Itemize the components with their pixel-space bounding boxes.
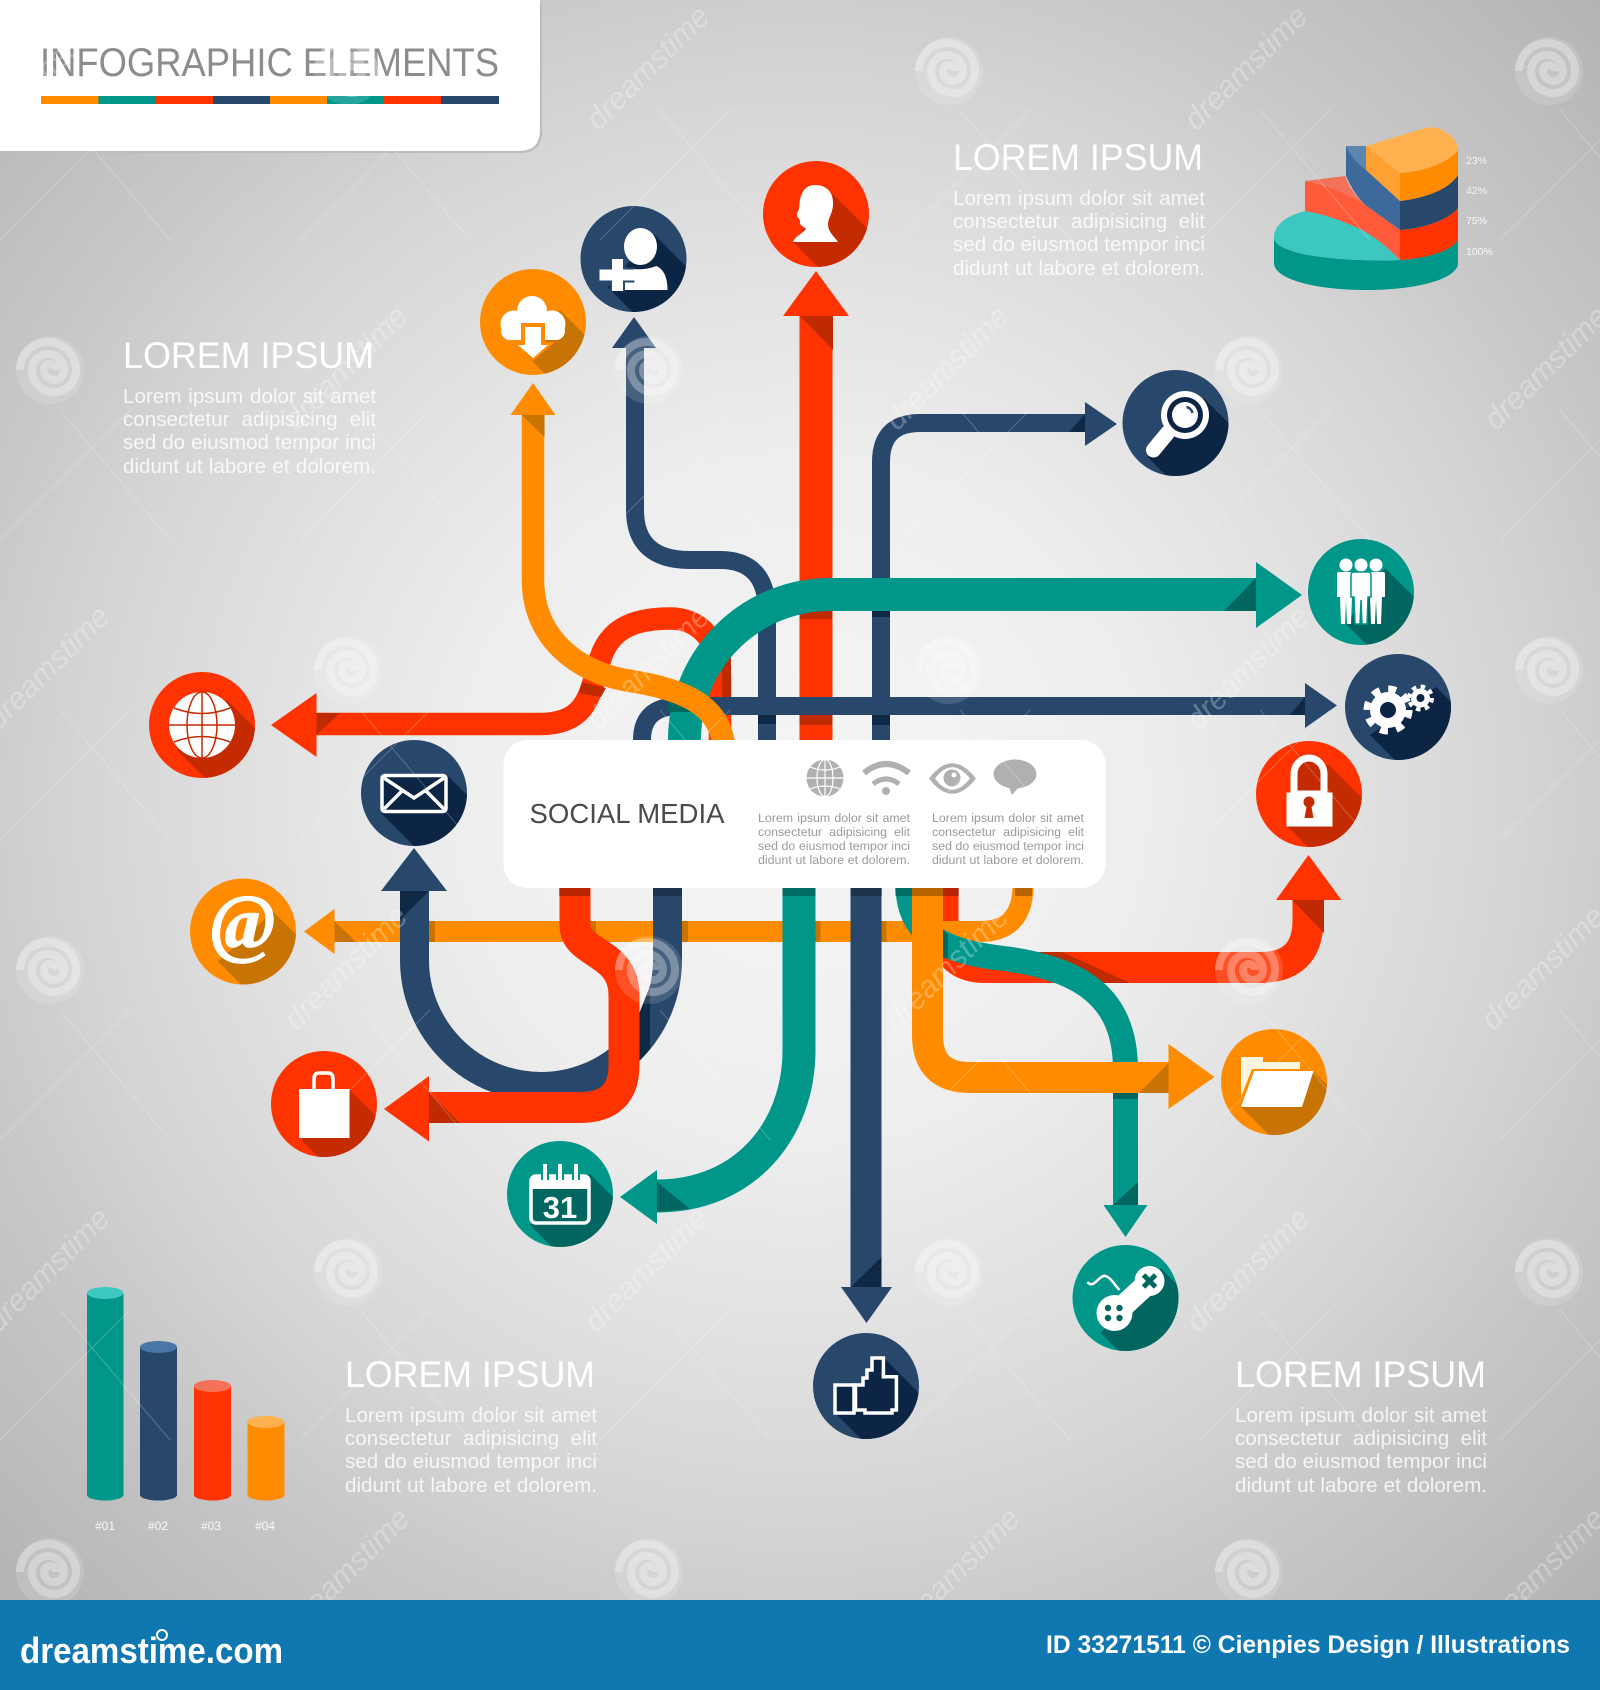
arrow: add-user navy [612, 317, 776, 740]
text block: left: consectetur adipisicing elit [123, 408, 376, 431]
panel text: column 2: consectetur adipisicing elit [932, 825, 1084, 839]
icon: cloud download [480, 269, 586, 375]
icon: thumbs up [813, 1333, 919, 1439]
bar chart: #01 [95, 1519, 115, 1533]
text block: bottom left: didunt ut labore et dolorem. [345, 1474, 597, 1497]
heading: social media: SOCIAL MEDIA [530, 798, 725, 829]
headings: LOREM IPSUM [123, 335, 374, 376]
text block: bottom left: consectetur adipisicing elit [345, 1427, 597, 1450]
pie chart: 75% [1466, 215, 1487, 227]
panel text: column 1: consectetur adipisicing elit [758, 825, 910, 839]
icon: panel eye [929, 763, 976, 794]
footer credit text: ID 33271511 © Cienpies Design / Illustrations [1046, 1631, 1570, 1659]
text block: bottom right: consectetur adipisicing elit [1235, 1427, 1487, 1450]
text block: bottom left [345, 1404, 597, 1497]
bar chart [87, 1287, 284, 1533]
footer bar [0, 1600, 1600, 1690]
icon: gears [1345, 654, 1451, 760]
pie chart: 42% [1466, 185, 1487, 197]
text block: bottom left: sed do eiusmod tempor inci [345, 1450, 597, 1473]
text block: bottom right [1235, 1404, 1487, 1497]
arrow: person red [783, 271, 849, 740]
panel text: column 2 [932, 811, 1084, 867]
arrow: thumb navy [841, 885, 892, 1323]
text block: left: Lorem ipsum dolor sit amet [123, 385, 376, 408]
text block: bottom right: sed do eiusmod tempor inci [1235, 1450, 1487, 1473]
text block: top right: sed do eiusmod tempor inci [953, 233, 1205, 256]
panel text: column 2: sed do eiusmod tempor inci [932, 839, 1084, 853]
panel text: column 2: Lorem ipsum dolor sit amet [932, 811, 1084, 825]
icon: padlock [1256, 741, 1362, 847]
arrow: bag red [384, 885, 624, 1142]
panel text: column 1 [758, 811, 910, 867]
arrow: calendar teal [620, 885, 799, 1224]
bar chart: #04 [255, 1519, 275, 1533]
text block: left: didunt ut labore et dolorem. [123, 455, 376, 478]
title: INFOGRAPHIC ELEMENTS [40, 41, 499, 85]
arrow network: lower lines [304, 848, 1342, 1323]
arrow network: upper lines [271, 271, 1337, 757]
panel text: column 2: didunt ut labore et dolorem. [932, 853, 1084, 867]
icon: panel globe [806, 760, 844, 796]
icon: panel wifi [864, 764, 909, 795]
headings: LOREM IPSUM [1235, 1354, 1486, 1395]
headings: LOREM IPSUM [953, 137, 1203, 178]
panel text: column 1: Lorem ipsum dolor sit amet [758, 811, 910, 825]
pie chart [1274, 127, 1493, 290]
panel text: column 1: sed do eiusmod tempor inci [758, 839, 910, 853]
icon: panel speech bubble [994, 760, 1036, 795]
text block: bottom right: Lorem ipsum dolor sit amet [1235, 1404, 1487, 1427]
icon: calendar [507, 1141, 613, 1247]
panel: social media [504, 740, 1106, 888]
arrow: folder orange [928, 885, 1214, 1109]
bar chart: #03 [201, 1519, 221, 1533]
headings: LOREM IPSUM [345, 1354, 595, 1395]
icon: team [1308, 539, 1414, 645]
arrow: lock red [943, 855, 1342, 983]
headings [123, 137, 1486, 1395]
icon: person head [763, 161, 869, 267]
text block: bottom right: didunt ut labore et dolorem. [1235, 1474, 1487, 1497]
icon: game controller [1072, 1245, 1178, 1351]
footer logo text: dreamstime.com [20, 1630, 283, 1671]
arrow: globe red [271, 618, 731, 757]
pie chart: 23% [1466, 155, 1487, 167]
arrow: gears navy [642, 683, 1337, 745]
title panel [0, 0, 542, 153]
arrow: magnifier navy [872, 402, 1117, 740]
arrow: team teal [668, 562, 1302, 745]
icon: magnifier [1122, 370, 1228, 476]
text block: top right: consectetur adipisicing elit [953, 210, 1205, 233]
icon: add user [580, 206, 686, 312]
arrow: mail navy loop [381, 848, 668, 1086]
arrow: at orange [304, 885, 1023, 954]
text block: left: sed do eiusmod tempor inci [123, 431, 376, 454]
text block: top right: Lorem ipsum dolor sit amet [953, 187, 1205, 210]
icon: mail [361, 740, 467, 846]
text block: bottom left: Lorem ipsum dolor sit amet [345, 1404, 597, 1427]
text block: top right [953, 187, 1205, 280]
arrow: game teal [908, 885, 1148, 1237]
icon: shopping bag [271, 1051, 377, 1157]
pie chart: 100% [1466, 246, 1493, 258]
panel edge shadows on lines [559, 888, 1032, 896]
panel text: column 1: didunt ut labore et dolorem. [758, 853, 910, 867]
icon: globe [149, 672, 255, 778]
icon: at sign [190, 878, 296, 984]
icon: calendar: 31 [543, 1190, 577, 1225]
text block: left [123, 385, 376, 478]
icon: folder [1221, 1029, 1327, 1135]
arrow: cloud orange [510, 383, 724, 745]
bar chart: #02 [148, 1519, 168, 1533]
icon: at sign: @ [211, 878, 275, 966]
text block: top right: didunt ut labore et dolorem. [953, 257, 1205, 280]
